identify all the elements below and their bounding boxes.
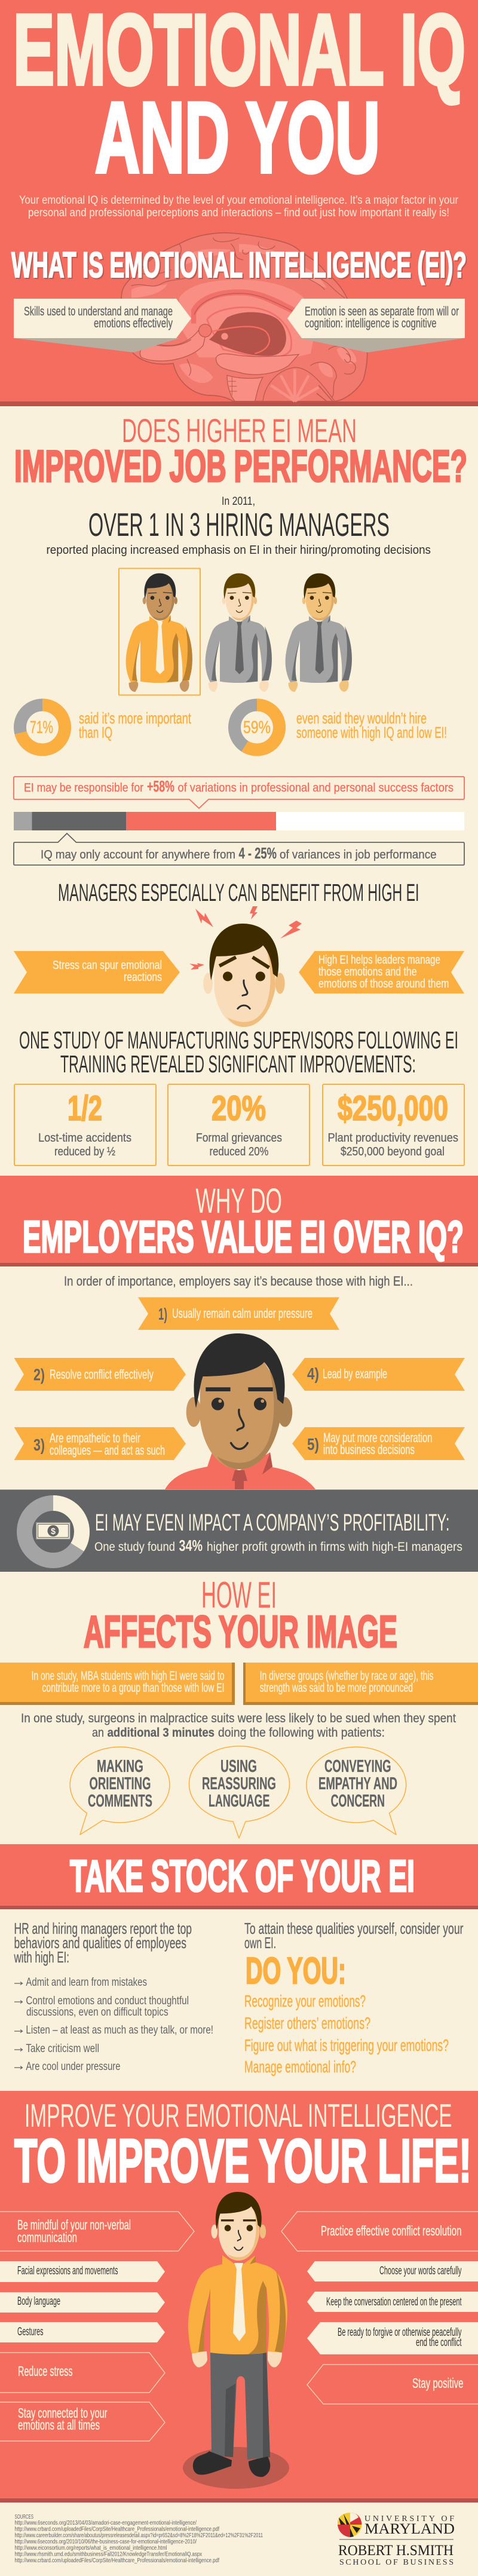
ribbon: reason 4: 4) — [307, 1364, 319, 1383]
tip: facial expressions: Facial expressions and movements — [17, 2265, 118, 2277]
sources list: http://www.6seconds.org/2010/10/06/the-business-case-for-emotional-intelligence-2010/ — [14, 2538, 197, 2545]
text: top behaviours intro — [14, 1919, 192, 1966]
ribbon: reason 5 — [292, 1427, 465, 1460]
panel: accidents stat — [14, 1084, 156, 1166]
tip: body language: Body language — [17, 2295, 60, 2308]
text: surgeons study — [21, 1712, 456, 1740]
chart: 59 percent donut — [234, 705, 447, 750]
list: self-assessment questions: Recognize your emotions? — [244, 1992, 366, 2010]
panel: MBA study — [0, 1663, 235, 1705]
tip: facial expressions — [0, 2261, 165, 2282]
sources list: SOURCES — [14, 2513, 33, 2520]
panel: grievances stat: Formal grievances — [196, 1131, 282, 1145]
heading: why employers value EI — [23, 1182, 464, 1262]
callout: empathy and concern: EMPATHY AND — [318, 1774, 397, 1793]
text: consider your own EI — [244, 1919, 464, 1952]
chart: 71 percent donut: than IQ — [79, 723, 112, 741]
list: behaviours — [14, 1976, 213, 2073]
chart: 71 percent donut — [20, 705, 192, 750]
list: self-assessment questions: Register others’ emotions? — [244, 2014, 370, 2032]
chart: 71 percent donut: 71% — [30, 718, 53, 737]
logo: University of Maryland Robert H. Smith School of Business — [338, 2513, 455, 2567]
tip: non-verbal communication: Be mindful of your non-verbal — [17, 2217, 131, 2232]
text: top behaviours intro: HR and hiring managers report the top — [14, 1919, 192, 1937]
logo: University of Maryland Robert H. Smith School of Business: SCHOOL OF BUSINESS — [339, 2558, 454, 2567]
callout: empathy and concern: CONCERN — [331, 1792, 385, 1811]
callout: orienting comments — [70, 1747, 170, 1835]
ribbon: reason 4 — [292, 1358, 465, 1391]
title — [13, 0, 465, 194]
section background: intro — [0, 0, 478, 406]
tip: stay positive — [307, 2365, 478, 2404]
list: behaviours: Take criticism well — [26, 2042, 99, 2055]
callout: empathy and concern — [307, 1747, 406, 1835]
panel: revenue stat: Plant productivity revenues — [327, 1131, 458, 1145]
list: behaviours: discussions, even on difficult topics — [26, 2005, 168, 2019]
callout: reassuring language: REASSURING — [202, 1774, 276, 1793]
panel: grievances stat: 20% — [212, 1089, 266, 1128]
ribbon: leaders: those emotions and the — [318, 965, 417, 979]
heading: improve your life — [14, 2097, 471, 2195]
chart: profit donut with banknote — [24, 1503, 82, 1560]
sources list: http://www.crbard.com/uploadedFiles/CorpSite/Healthcare_Professionals/emotional-intelligence.pdf — [14, 2526, 219, 2533]
ribbon: reason 2 — [14, 1358, 186, 1391]
text: surgeons study: an — [92, 1726, 104, 1740]
panel: grievances stat: reduced 20% — [209, 1145, 269, 1158]
callout: IQ share: IQ may only account for anywhere from — [41, 848, 235, 861]
ribbon: stress — [14, 951, 180, 993]
callout: EI share: EI may be responsible for — [24, 781, 143, 795]
text: top behaviours intro: with high EI: — [14, 1948, 69, 1966]
ribbon: stress: Stress can spur emotional — [53, 959, 162, 972]
heading: how EI affects your image: HOW EI — [201, 1575, 277, 1616]
text: surgeons study: doing the following with patients: — [218, 1726, 385, 1740]
tip: conflict resolution — [281, 2212, 478, 2251]
logo: University of Maryland Robert H. Smith School of Business: MARYLAND — [364, 2521, 455, 2537]
callout: EI share — [14, 777, 464, 808]
hiring managers statement: In 2011, — [222, 495, 255, 508]
callout: EI share: of variations in professional and personal success factors — [178, 781, 454, 795]
ribbon: reason 1: Usually remain calm under pressure — [172, 1306, 312, 1321]
logo: University of Maryland Robert H. Smith School of Business: ROBERT H.SMITH — [338, 2543, 454, 2559]
panel: profitability band: 34% — [179, 1537, 203, 1554]
panel: MBA study: contribute more to a group than those with low EI — [42, 1681, 225, 1695]
sources list: http://www.rhsmith.umd.edu/smithbusiness/Fall2012/KnowledgeTransfer/EmotionalIQ.aspx — [14, 2551, 203, 2558]
chart: share bar — [14, 812, 464, 830]
callout: IQ share — [14, 833, 464, 865]
ribbon: reason 2: 2) — [33, 1366, 45, 1384]
list: behaviours: Control emotions and conduct thoughtful — [26, 1994, 189, 2007]
heading: do you: DO YOU: — [246, 1951, 346, 1992]
text: order of importance: In order of importance, employers say it’s because those with high EI... — [64, 1274, 413, 1289]
panel: definition boxes: emotions effectively — [94, 317, 173, 330]
ribbon: reason 2: Resolve conflict effectively — [50, 1367, 154, 1382]
tip: non-verbal communication: communication — [17, 2230, 77, 2245]
callout: orienting comments: MAKING — [97, 1757, 143, 1776]
section background: improve — [0, 2091, 478, 2503]
callout: orienting comments: ORIENTING — [90, 1774, 151, 1793]
panel: grievances stat — [168, 1084, 310, 1166]
list: behaviours: Listen – at least as much as they talk, or more! — [26, 2023, 213, 2037]
panel: MBA study: In one study, MBA students with high EI were said to — [31, 1669, 225, 1683]
panel: profitability band — [0, 1490, 478, 1572]
text: surgeons study: additional 3 minutes — [108, 1726, 215, 1740]
ribbon: reason 1: 1) — [158, 1305, 167, 1323]
icon: stressed manager — [189, 906, 302, 1027]
list: self-assessment questions: Manage emotional info? — [244, 2057, 356, 2076]
ribbon: leaders: High EI helps leaders manage — [318, 953, 440, 967]
tip: reduce stress: Reduce stress — [18, 2363, 73, 2379]
panel: definition boxes — [14, 299, 465, 352]
section background: why employers — [0, 1176, 478, 1266]
tip: gestures — [0, 2322, 165, 2342]
icon: brain cross-section — [121, 233, 367, 401]
ribbon: reason 3 — [14, 1427, 186, 1460]
callout: EI share: +58% — [147, 777, 174, 795]
ribbon: reason 3: Are empathetic to their — [50, 1430, 140, 1446]
intro text — [19, 194, 459, 219]
chart: 71 percent donut: said it’s more important — [79, 709, 192, 727]
icon: manager in grey 1 — [206, 574, 272, 692]
panel: revenue stat: $250,000 beyond goal — [341, 1145, 445, 1158]
panel: accidents stat: Lost-time accidents — [38, 1131, 131, 1145]
ribbon: reason 3: 3) — [33, 1436, 45, 1454]
hiring managers statement: reported placing increased emphasis on EI in their hiring/promoting decisions — [47, 544, 431, 557]
callout: reassuring language: LANGUAGE — [209, 1792, 270, 1811]
panel: profitability band: One study found — [94, 1540, 175, 1554]
ribbon: stress: reactions — [124, 971, 162, 984]
logo: University of Maryland Robert H. Smith School of Business: UNIVERSITY OF — [364, 2514, 454, 2523]
text: consider your own EI: own EI. — [244, 1934, 276, 1952]
sources list: http://www.crbard.com/uploadedFiles/CorpSite/Healthcare_Professionals/emotional-intelligence.pdf — [14, 2557, 219, 2564]
sources list — [14, 2513, 263, 2564]
panel: profitability band: higher profit growth in firms with high-EI managers — [207, 1540, 462, 1554]
chart: profit donut with banknote: $ — [51, 1526, 56, 1537]
icon: manager in grey 2 — [286, 574, 352, 692]
tip: stay present — [307, 2292, 478, 2312]
text: top behaviours intro: behaviors and qualities of employees — [14, 1934, 186, 1952]
ribbon: reason 5: 5) — [307, 1435, 319, 1453]
ribbon: leaders — [299, 951, 464, 993]
icon: standing man — [183, 2192, 289, 2489]
ribbon: reason 5: into business decisions — [323, 1442, 415, 1457]
heading: manufacturing study — [19, 1026, 458, 1078]
heading: job performance — [14, 412, 467, 491]
ribbon: reason 1 — [138, 1298, 339, 1330]
tip: stay connected — [0, 2402, 165, 2441]
callout: empathy and concern: CONVEYING — [324, 1757, 391, 1776]
ribbon: reason 4: Lead by example — [323, 1366, 387, 1381]
tip: choose words — [307, 2261, 478, 2281]
tip: forgive — [307, 2322, 478, 2354]
panel: accidents stat: reduced by ½ — [54, 1145, 115, 1158]
callout: reassuring language: USING — [220, 1757, 257, 1776]
tip: stay connected: Stay connected to your — [18, 2405, 108, 2421]
hiring managers statement — [47, 495, 431, 557]
heading: why employers value EI: WHY DO — [196, 1182, 282, 1220]
panel: revenue stat: $250,000 — [338, 1089, 448, 1128]
panel: diverse groups — [243, 1663, 478, 1705]
list: self-assessment questions — [244, 1992, 449, 2076]
icon: man in coral shirt — [165, 1333, 315, 1489]
list: behaviours: Are cool under pressure — [26, 2060, 121, 2073]
tip: stay connected: emotions at all times — [18, 2417, 100, 2433]
tip: gestures: Gestures — [17, 2326, 43, 2338]
callout: orienting comments: COMMENTS — [88, 1792, 152, 1811]
section background: take stock — [0, 1844, 478, 1909]
highlight frame: one of three managers — [119, 569, 200, 695]
heading: how EI affects your image — [84, 1575, 397, 1657]
tip: body language — [0, 2292, 165, 2313]
tip: reduce stress — [0, 2353, 165, 2393]
icon: Maryland shield — [338, 2513, 362, 2537]
panel: revenue stat — [323, 1084, 464, 1166]
callout: IQ share: 4 - 25% — [239, 844, 277, 862]
panel: definition boxes: Skills used to understand and manage — [24, 305, 173, 318]
sources list: http://www.careerbuilder.com/share/aboutus/pressreleasesdetail.aspx?id=pr652&sd=8%2F18%2F2011&ed=12%2F31%2F2011 — [14, 2532, 263, 2539]
panel: accidents stat: 1/2 — [68, 1089, 102, 1128]
chart: 59 percent donut: 59% — [243, 718, 271, 737]
sources list: http://www.6seconds.org/2013/04/03/amadori-case-engagement-emotional-intelligence/ — [14, 2519, 197, 2526]
callout: reassuring language — [189, 1746, 289, 1838]
icon: manager in orange — [126, 574, 192, 692]
tip: non-verbal communication — [0, 2212, 194, 2251]
sources list: http://www.eiconsortium.org/reports/what_is_emotional_intelligence.html — [14, 2544, 167, 2552]
ribbon: reason 3: colleagues — and act as such — [50, 1443, 165, 1458]
callout: IQ share: of variances in job performance — [280, 848, 437, 861]
list: behaviours: Admit and learn from mistakes — [26, 1976, 147, 1989]
